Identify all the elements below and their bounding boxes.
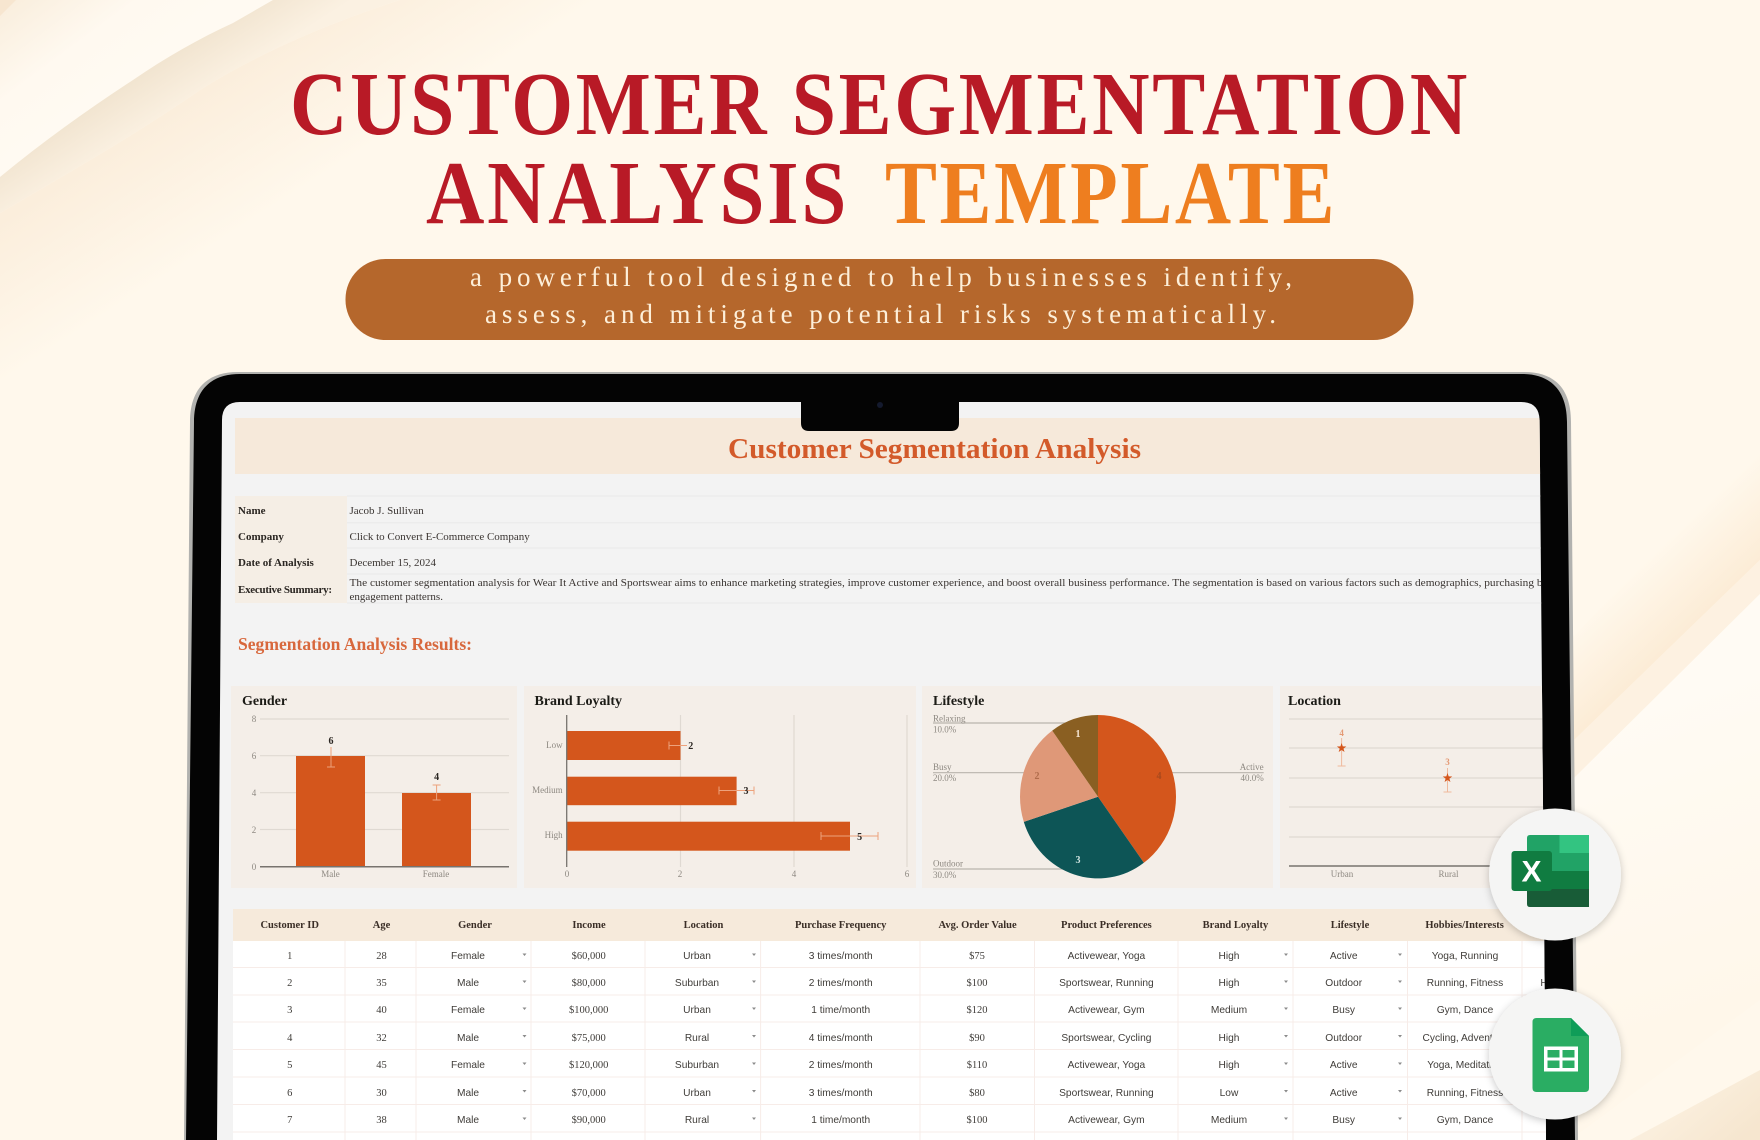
row 5: $110: [967, 1060, 987, 1071]
panel: lifestyle pie chart: Relaxing: [933, 714, 966, 724]
table header: Age: [373, 920, 391, 931]
row 6: [287, 1088, 1503, 1099]
row 1: Female: [451, 951, 485, 962]
row 2: Outdoor: [1325, 978, 1363, 989]
row 5: High: [1219, 1060, 1239, 1071]
row 4: 32: [376, 1033, 387, 1044]
subtitle pill: a powerful tool designed to help businesses identify,: [470, 262, 1292, 292]
title: [290, 55, 1470, 243]
row 7: $100: [966, 1115, 988, 1126]
row 3: 40: [376, 1005, 387, 1016]
row 6: 3 times/month: [809, 1088, 873, 1099]
row 6: Male: [457, 1088, 479, 1099]
panel: brand loyalty bar chart: 0: [565, 869, 570, 879]
row 4: High: [1219, 1033, 1239, 1044]
row 6: Running, Fitness: [1427, 1088, 1503, 1099]
row 4: Cycling, Adventure: [1423, 1033, 1508, 1044]
title: TEMPLATE: [885, 144, 1337, 243]
panel: brand loyalty bar chart: 6: [905, 869, 910, 879]
row 7: Busy: [1332, 1115, 1356, 1126]
pie slice: relaxing: [1052, 715, 1098, 797]
row 1: $75: [969, 951, 985, 962]
row 2: $80,000: [572, 978, 606, 989]
panel: gender bar chart: 8: [252, 714, 257, 724]
row 4: $75,000: [572, 1033, 606, 1044]
icon: excel: X: [1521, 856, 1542, 888]
table header: [233, 909, 1548, 941]
row 7: [287, 1115, 1494, 1126]
subtitle pill: [346, 259, 1414, 340]
table header: Lifestyle: [1331, 920, 1370, 931]
panel: brand loyalty bar chart: Medium: [532, 785, 563, 795]
row 6: $70,000: [572, 1088, 606, 1099]
row 7: 38: [376, 1115, 387, 1126]
row 2: [287, 978, 1548, 989]
panel: gender bar chart: 4: [252, 788, 257, 798]
panel: gender bar chart: 0: [252, 862, 257, 872]
panel: lifestyle pie chart: 40.0%: [1240, 773, 1264, 783]
row 7: Male: [457, 1115, 479, 1126]
panel: brand loyalty bar chart: 2: [688, 741, 693, 752]
row 6: Urban: [683, 1088, 711, 1099]
row 2: 35: [376, 978, 387, 989]
info table: Jacob J. Sullivan: [350, 505, 424, 517]
row 2: High: [1219, 978, 1239, 989]
panel: gender bar chart: 4: [434, 772, 439, 783]
row 5: Suburban: [675, 1060, 719, 1071]
row 6: Low: [1220, 1088, 1239, 1099]
panel: gender bar chart: [231, 686, 517, 888]
row 7: Activewear, Gym: [1068, 1115, 1145, 1126]
row 6: 30: [376, 1088, 387, 1099]
spreadsheet screen: [231, 418, 1550, 1140]
row 5: Female: [451, 1060, 485, 1071]
panel: gender bar chart: 6: [328, 736, 334, 747]
panel: lifestyle pie chart: 2: [1034, 771, 1040, 782]
panel: lifestyle pie chart: 3: [1076, 855, 1080, 866]
sheet heading band: Customer Segmentation Analysis: [728, 434, 1141, 465]
panel: brand loyalty bar chart: High: [545, 830, 563, 840]
row 1: 1: [287, 951, 292, 962]
info table: The customer segmentation analysis for Wear It Active and Sportswear aims to enhance marketing strategies, improve customer experience, and boost overall business performance. The segmentation is based on various factors such as demographics, purchasing b: [350, 577, 1543, 589]
info table: engagement patterns.: [350, 591, 443, 603]
row 5: 45: [376, 1060, 387, 1071]
row 5: 2 times/month: [809, 1060, 873, 1071]
row 1: Urban: [683, 951, 711, 962]
panel: gender bar chart: Male: [321, 869, 340, 879]
panel: gender bar chart: Gender: [242, 694, 287, 709]
row 3: 1 time/month: [811, 1005, 870, 1016]
panel: gender bar chart: 6: [252, 751, 257, 761]
row 5: [288, 1060, 1490, 1070]
panel: lifestyle pie chart: Lifestyle: [933, 694, 984, 709]
row 7: $90,000: [572, 1115, 606, 1126]
sheet heading band: [235, 418, 1545, 474]
row 2: $100: [966, 978, 988, 989]
pie slice: outdoor: [1024, 797, 1144, 878]
subtitle pill: assess, and mitigate potential risks systematically.: [485, 299, 1276, 329]
row 6: Sportswear, Running: [1059, 1088, 1154, 1099]
table header: Product Preferences: [1061, 920, 1152, 931]
panel: lifestyle pie chart: 10.0%: [933, 724, 957, 734]
panel: lifestyle pie chart: [922, 686, 1273, 888]
panel: location chart: Location: [1288, 694, 1341, 709]
row 1: Activewear, Yoga: [1068, 951, 1146, 962]
panel: brand loyalty bar chart: 4: [792, 869, 797, 879]
panel: gender bar chart: 2: [252, 825, 256, 835]
row 7: 7: [287, 1115, 292, 1126]
row 6: $80: [969, 1088, 985, 1099]
panel: location chart: [1280, 686, 1550, 888]
row 3: Medium: [1211, 1005, 1247, 1016]
row 4: 4: [287, 1033, 293, 1044]
row 7: 1 time/month: [811, 1115, 870, 1126]
panel: brand loyalty bar chart: 5: [857, 832, 862, 843]
customer data table: [233, 909, 1548, 1140]
info table: Executive Summary:: [238, 584, 332, 596]
row 3: Busy: [1332, 1005, 1356, 1016]
panel: brand loyalty bar chart: 3: [744, 786, 748, 797]
panel: location chart: Rural: [1438, 869, 1459, 879]
title: CUSTOMER SEGMENTATION: [290, 55, 1470, 154]
row 7: Gym, Dance: [1437, 1115, 1494, 1126]
table header: Hobbies/Interests: [1425, 920, 1504, 931]
row 2: Suburban: [675, 978, 719, 989]
tablet frame: [184, 372, 1578, 1140]
row 4: [287, 1033, 1492, 1043]
row 4: 4 times/month: [809, 1033, 873, 1044]
icon: excel: [1489, 808, 1621, 940]
pie slice: busy: [1020, 731, 1098, 822]
panel: location chart: 3: [1445, 757, 1450, 767]
pie slice: active: [1098, 715, 1176, 863]
panel: brand loyalty bar chart: 2: [678, 869, 682, 879]
info table: [235, 496, 1545, 603]
panel: location chart: 4: [1339, 728, 1344, 738]
info table: Date of Analysis: [238, 557, 314, 569]
table header: Income: [572, 920, 606, 931]
panel: brand loyalty bar chart: [524, 686, 916, 888]
row 3: $100,000: [569, 1005, 608, 1016]
row 4: $90: [969, 1033, 985, 1044]
row 2: H: [1540, 978, 1548, 989]
panel: lifestyle pie chart: 30.0%: [933, 870, 957, 880]
row 1: $60,000: [572, 951, 606, 962]
row 5: Active: [1330, 1060, 1358, 1071]
row 1: 28: [376, 951, 387, 962]
row 3: [287, 1005, 1494, 1016]
row 3: Activewear, Gym: [1068, 1005, 1145, 1016]
row 1: [287, 951, 1499, 962]
row 1: 3 times/month: [809, 951, 873, 962]
table header: Gender: [458, 920, 492, 931]
row 1: High: [1219, 951, 1239, 962]
section heading: Segmentation Analysis Results:: [238, 634, 472, 654]
row 2: 2 times/month: [809, 978, 873, 989]
panel: lifestyle pie chart: Outdoor: [933, 859, 963, 869]
info table: Company: [238, 531, 284, 543]
title: ANALYSIS: [426, 144, 849, 243]
row 3: Gym, Dance: [1437, 1005, 1494, 1016]
tablet notch with camera: [801, 400, 959, 431]
row 6: 6: [287, 1088, 292, 1099]
row 5: 5: [287, 1060, 292, 1071]
row 2: 2: [287, 978, 292, 989]
row 2: Male: [457, 978, 479, 989]
table header: Brand Loyalty: [1203, 920, 1269, 931]
table header: Purchase Frequency: [795, 920, 887, 931]
panel: brand loyalty bar chart: Brand Loyalty: [534, 694, 622, 709]
table header: Location: [684, 920, 723, 931]
row 3: Urban: [683, 1005, 711, 1016]
row 1: Yoga, Running: [1432, 951, 1499, 962]
row 3: 3: [287, 1005, 292, 1016]
panel: lifestyle pie chart: Active: [1240, 762, 1264, 772]
panel: lifestyle pie chart: 20.0%: [933, 773, 957, 783]
row 4: Male: [457, 1033, 479, 1044]
panel: lifestyle pie chart: Busy: [933, 762, 952, 772]
panel: brand loyalty bar chart: Low: [546, 740, 563, 750]
info table: Name: [238, 505, 266, 517]
panel: lifestyle pie chart: 1: [1076, 729, 1080, 740]
row 3: Female: [451, 1005, 485, 1016]
row 5: Yoga, Meditation: [1427, 1060, 1503, 1071]
panel: lifestyle pie chart: 4: [1156, 771, 1162, 782]
row 6: Active: [1330, 1088, 1358, 1099]
row 4: Rural: [685, 1033, 709, 1044]
row 2: Running, Fitness: [1427, 978, 1503, 989]
table header: Avg. Order Value: [939, 920, 1017, 931]
row 7: Rural: [685, 1115, 709, 1126]
row 7: Medium: [1211, 1115, 1247, 1126]
icon: google sheets: [1489, 988, 1621, 1120]
row 2: Sportswear, Running: [1059, 978, 1154, 989]
table header: Customer ID: [260, 920, 319, 931]
row 5: Activewear, Yoga: [1068, 1060, 1146, 1071]
panel: gender bar chart: Female: [423, 869, 449, 879]
row 1: Active: [1330, 951, 1358, 962]
row 5: $120,000: [569, 1060, 608, 1071]
info table: December 15, 2024: [350, 557, 436, 569]
row 3: $120: [966, 1005, 988, 1016]
row 4: Sportswear, Cycling: [1061, 1033, 1152, 1044]
info table: Click to Convert E-Commerce Company: [350, 531, 530, 543]
row 4: Outdoor: [1325, 1033, 1363, 1044]
panel: location chart: Urban: [1331, 869, 1354, 879]
